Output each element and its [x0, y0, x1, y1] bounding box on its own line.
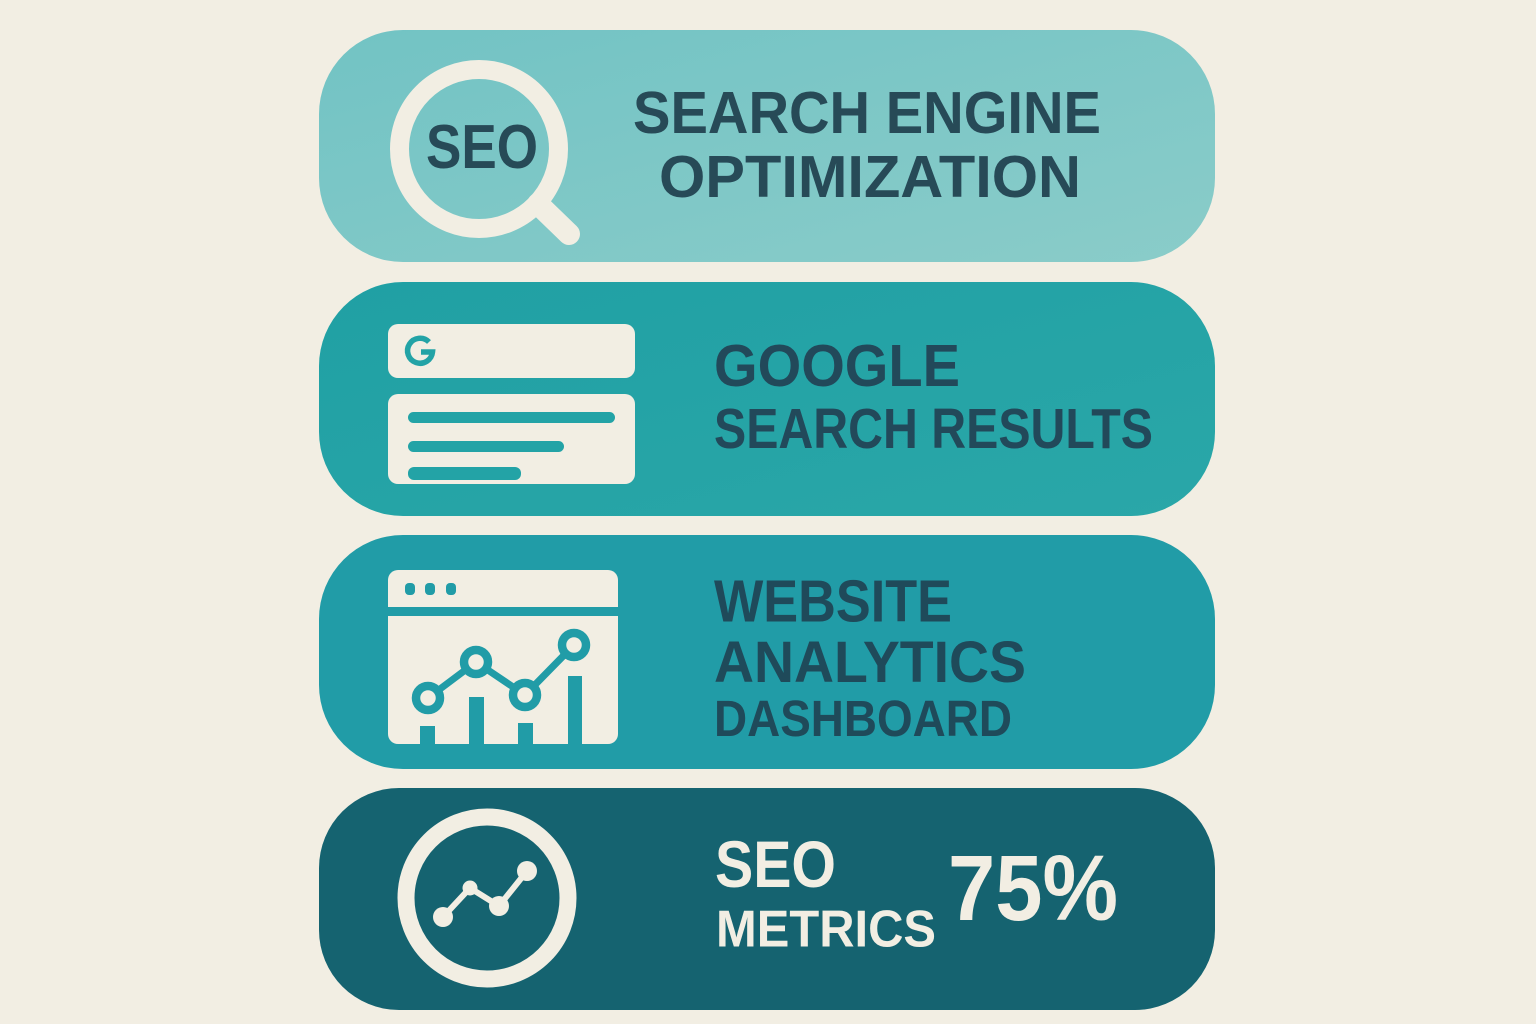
heading: google search results [714, 333, 1153, 461]
heading: search engine optimization [633, 80, 1101, 210]
panel: website analytics dashboard [319, 535, 1215, 769]
icon: search bar and results [388, 324, 635, 484]
icon: circular trend line [406, 817, 568, 979]
heading: website analytics dashboard: DASHBOARD [714, 690, 1012, 747]
heading: website analytics dashboard: ANALYTICS [714, 630, 1026, 695]
heading: search engine optimization: SEARCH ENGINE [633, 80, 1101, 146]
panel: seo metrics [319, 788, 1215, 1010]
heading: google search results: GOOGLE [714, 333, 960, 399]
heading: seo metrics: METRICS [716, 900, 936, 958]
metric: 75 percent: 75% [948, 836, 1118, 940]
heading: google search results: SEARCH RESULTS [714, 397, 1153, 461]
panel: search engine optimization [319, 30, 1215, 262]
icon: magnifying glass with SEO: SEO [426, 113, 538, 182]
icon: magnifying glass with SEO [400, 70, 569, 234]
icon: analytics browser window [388, 570, 618, 744]
heading: seo metrics [715, 827, 936, 958]
heading: website analytics dashboard [714, 568, 1026, 747]
heading: website analytics dashboard: WEBSITE [714, 568, 952, 634]
panel: google search results [319, 282, 1215, 516]
heading: seo metrics: SEO [715, 827, 836, 901]
heading: search engine optimization: OPTIMIZATION [659, 144, 1081, 210]
